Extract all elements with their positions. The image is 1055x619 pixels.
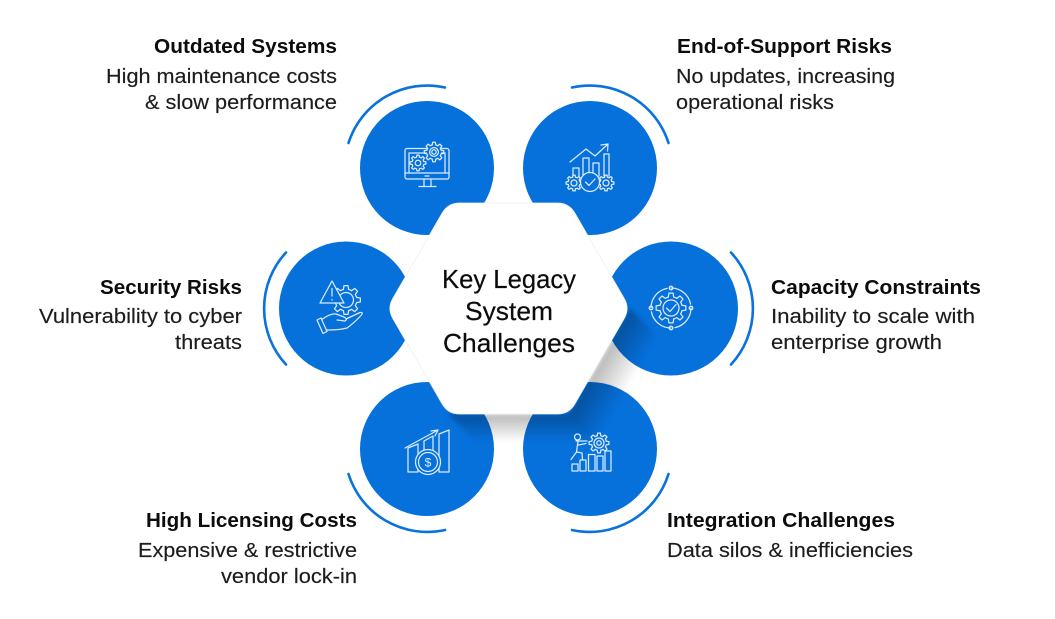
label: security risks: Vulnerability to cyber	[39, 306, 242, 328]
label: outdated systems	[106, 36, 337, 114]
label: end-of-support risks: End-of-Support Risks	[677, 36, 892, 58]
center title: Key Legacy	[442, 264, 576, 294]
arc: integration challenges	[572, 474, 668, 532]
label: security risks: threats	[175, 332, 242, 354]
circle: capacity constraints	[604, 242, 738, 376]
icon: rising costs with dollar coin	[405, 430, 449, 474]
icon: person climbing bars with gear	[571, 433, 611, 471]
label: outdated systems: & slow performance	[145, 92, 337, 114]
center title: System	[465, 296, 553, 326]
label: capacity constraints: Capacity Constraints	[771, 277, 981, 299]
label: integration challenges: Data silos & inefficiencies	[667, 540, 913, 562]
arc: security risks	[264, 252, 286, 364]
label: end-of-support risks: No updates, increasing	[676, 66, 895, 88]
label: high licensing costs	[138, 510, 357, 588]
label: outdated systems: Outdated Systems	[154, 36, 337, 58]
circle: integration challenges	[523, 382, 657, 516]
label: capacity constraints: Inability to scale with	[771, 306, 975, 328]
icon: gear with checkmark	[649, 286, 693, 330]
icon: warning with gear and hand	[317, 281, 362, 334]
arc: outdated systems	[348, 86, 445, 143]
circle: outdated systems	[360, 101, 494, 235]
label: high licensing costs: Expensive & restrictive	[138, 540, 357, 562]
center title: Challenges	[443, 328, 575, 358]
icon: rising costs with dollar coin: $	[425, 456, 432, 470]
label: high licensing costs: vendor lock-in	[221, 566, 357, 588]
circle: end-of-support risks	[523, 101, 657, 235]
center title	[442, 264, 576, 358]
circle: security risks	[279, 242, 413, 376]
label: security risks: Security Risks	[100, 277, 242, 299]
label: capacity constraints	[771, 277, 981, 354]
circle: high licensing costs	[360, 382, 494, 516]
label: high licensing costs: High Licensing Costs	[146, 510, 357, 532]
label: integration challenges: Integration Challenges	[667, 510, 895, 532]
label: security risks	[39, 277, 242, 354]
label: integration challenges	[667, 510, 913, 562]
label: end-of-support risks	[676, 36, 895, 114]
arc: high licensing costs	[348, 474, 445, 532]
central hexagon	[390, 203, 627, 414]
arc: end-of-support risks	[572, 86, 668, 143]
label: capacity constraints: enterprise growth	[771, 332, 942, 354]
arc: capacity constraints	[731, 252, 753, 364]
icon: monitor with gears	[405, 142, 449, 186]
label: outdated systems: High maintenance costs	[106, 66, 337, 88]
icon: growth chart with gears	[566, 144, 614, 192]
hexagon shadow	[448, 308, 660, 444]
label: end-of-support risks: operational risks	[676, 92, 834, 114]
